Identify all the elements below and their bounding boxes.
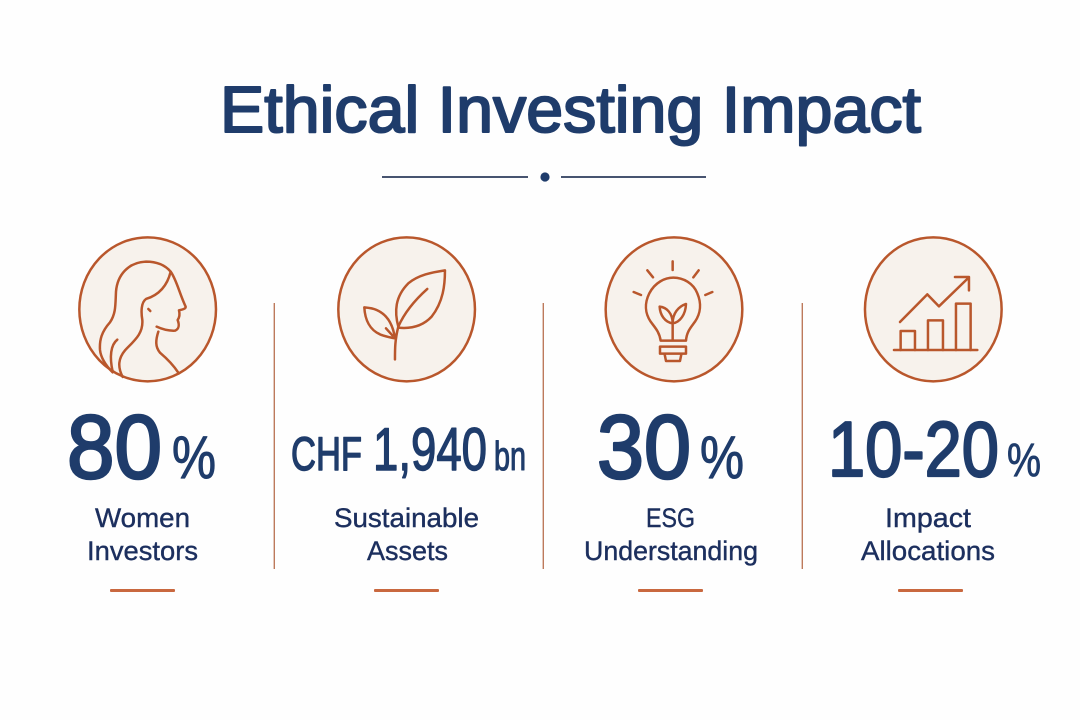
panel: impact allocations — [828, 237, 1041, 592]
title: Ethical Investing Impact — [220, 73, 921, 146]
accent underline — [374, 589, 439, 592]
label: women investors: Investors — [87, 536, 198, 566]
icon: woman profile — [79, 237, 216, 381]
column divider 1 — [274, 303, 275, 569]
label: impact allocations: Impact — [885, 503, 972, 533]
panel: women investors — [67, 237, 216, 592]
label: sustainable assets: Sustainable — [334, 503, 479, 533]
label: women investors: Women — [95, 503, 190, 533]
panel: sustainable assets — [291, 237, 526, 592]
label: ESG understanding: Understanding — [584, 536, 758, 566]
statistic: CHF 1,940bn: bn — [494, 433, 526, 479]
icon: light bulb with sprout — [606, 237, 742, 381]
accent underline — [638, 589, 703, 592]
label: ESG understanding — [584, 503, 758, 566]
label: impact allocations — [861, 503, 995, 566]
accent underline — [110, 589, 175, 592]
title divider with dot — [382, 172, 706, 182]
statistic: 10-20%: % — [1007, 433, 1041, 486]
statistic: CHF 1,940bn — [291, 416, 526, 483]
panel: ESG understanding — [584, 237, 758, 592]
statistic: 30%: 30 — [597, 398, 691, 498]
column divider 2 — [543, 303, 544, 569]
icon: leaf sprout — [338, 237, 475, 381]
label: women investors — [87, 503, 198, 566]
statistic: 80% — [67, 398, 216, 498]
icon: rising bar chart — [865, 237, 1002, 381]
label: impact allocations: Allocations — [861, 536, 995, 566]
statistic: 30%: % — [700, 424, 744, 491]
statistic: CHF 1,940bn: CHF — [291, 427, 362, 480]
label: ESG understanding: ESG — [646, 503, 695, 533]
label: sustainable assets — [334, 503, 479, 566]
statistic: 80%: % — [172, 424, 216, 491]
column divider 3 — [802, 303, 803, 569]
accent underline — [898, 589, 963, 592]
statistic: 30% — [597, 398, 744, 498]
statistic: 80%: 80 — [67, 398, 162, 498]
label: sustainable assets: Assets — [367, 536, 448, 566]
statistic: 10-20%: 10-20 — [828, 405, 999, 493]
statistic: CHF 1,940bn: 1,940 — [373, 416, 487, 483]
